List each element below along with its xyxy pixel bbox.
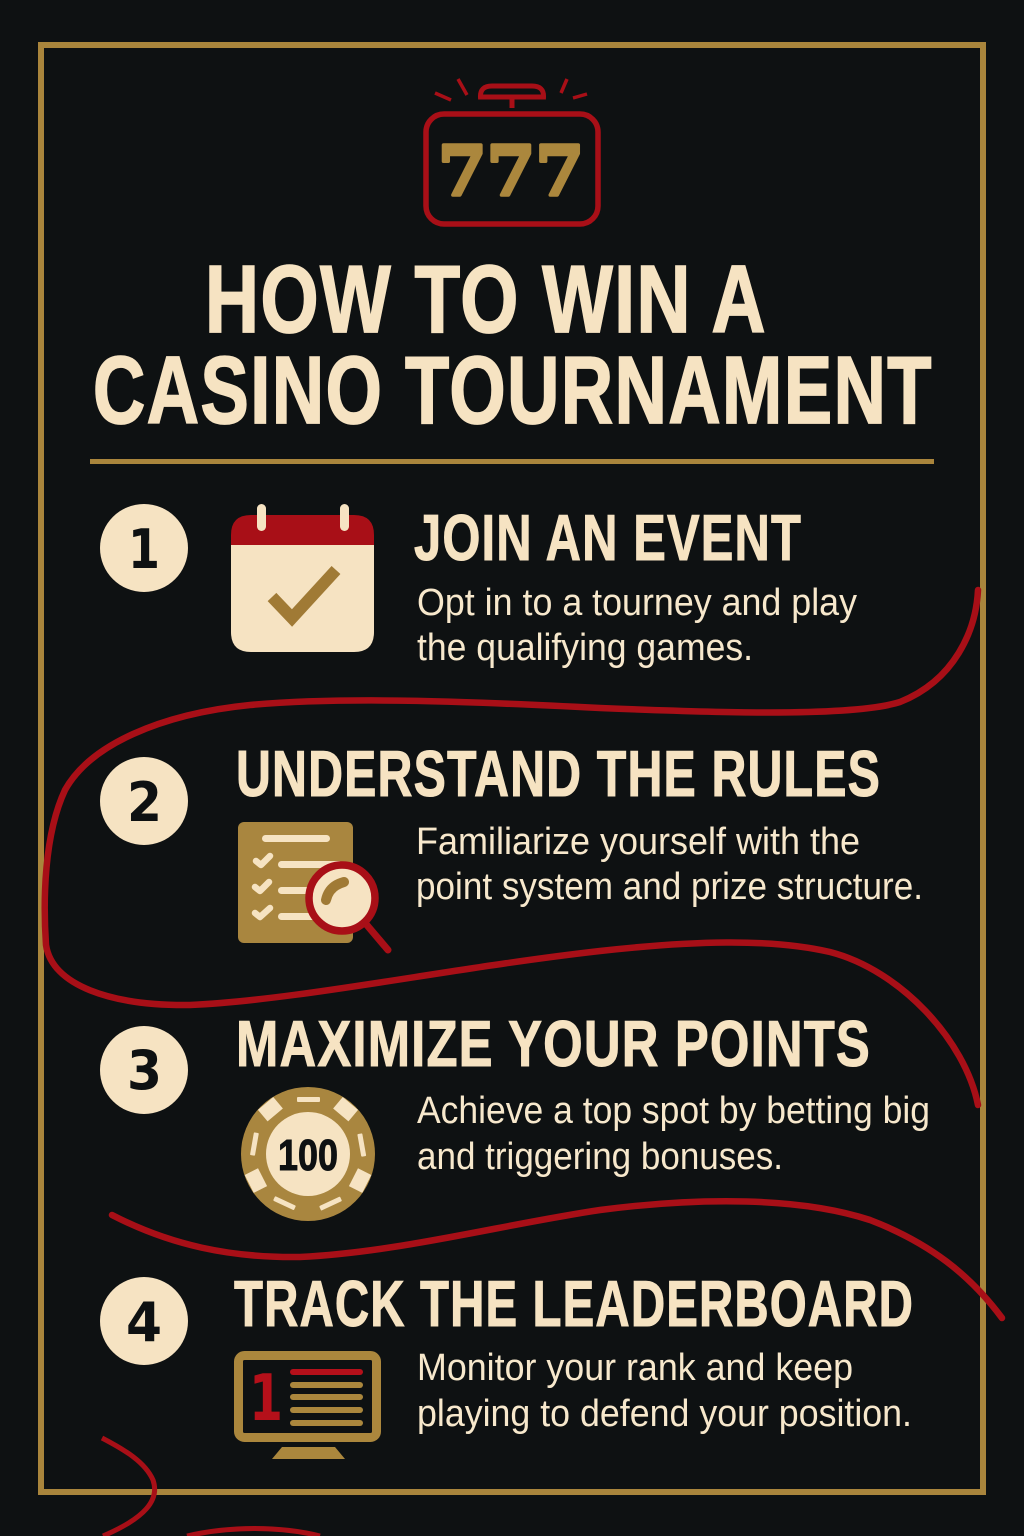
- icon: leaderboard monitor: [238, 1356, 376, 1459]
- icon: calendar with check: [231, 504, 374, 652]
- description 3: Achieve a top spot by betting big: [417, 1090, 930, 1132]
- icon: checklist with magnifier: [238, 822, 388, 950]
- step 2: [100, 737, 923, 950]
- icon: leaderboard monitor: 1: [249, 1362, 283, 1436]
- description 4: playing to defend your position.: [417, 1393, 912, 1435]
- description 3: [417, 1090, 930, 1178]
- icon: slot machine: [426, 79, 598, 224]
- description 4: Monitor your rank and keep: [417, 1347, 853, 1389]
- red decorative ribbon bottom: [102, 1438, 320, 1536]
- description 2: [416, 821, 923, 908]
- step 1: [100, 501, 857, 669]
- number badge 1: 1: [128, 518, 160, 581]
- description 1: [417, 582, 857, 669]
- description 1: the qualifying games.: [417, 627, 753, 669]
- description 2: point system and prize structure.: [416, 866, 923, 908]
- red decorative ribbon upper: [45, 590, 978, 1105]
- number badge 2: [100, 757, 188, 845]
- description 1: Opt in to a tourney and play: [417, 582, 857, 624]
- icon: slot machine: 777: [438, 132, 584, 212]
- description 3: and triggering bonuses.: [417, 1136, 783, 1178]
- number badge 4: 4: [126, 1291, 162, 1354]
- description 4: [417, 1347, 912, 1435]
- number badge 4: [100, 1277, 188, 1365]
- heading: join an event: JOIN AN EVENT: [414, 501, 802, 574]
- step 3: [100, 1007, 930, 1221]
- icon: poker chip: [241, 1087, 375, 1221]
- title: HOW TO WIN A: [205, 246, 767, 353]
- number badge 1: [100, 504, 188, 592]
- number badge 2: 2: [127, 771, 162, 834]
- description 2: Familiarize yourself with the: [416, 821, 860, 863]
- icon: poker chip: 100: [278, 1131, 338, 1180]
- title: [93, 246, 933, 444]
- number badge 3: [100, 1026, 188, 1114]
- number badge 3: 3: [127, 1039, 162, 1102]
- step 4: [100, 1267, 914, 1459]
- red decorative ribbon lower: [112, 1201, 1002, 1318]
